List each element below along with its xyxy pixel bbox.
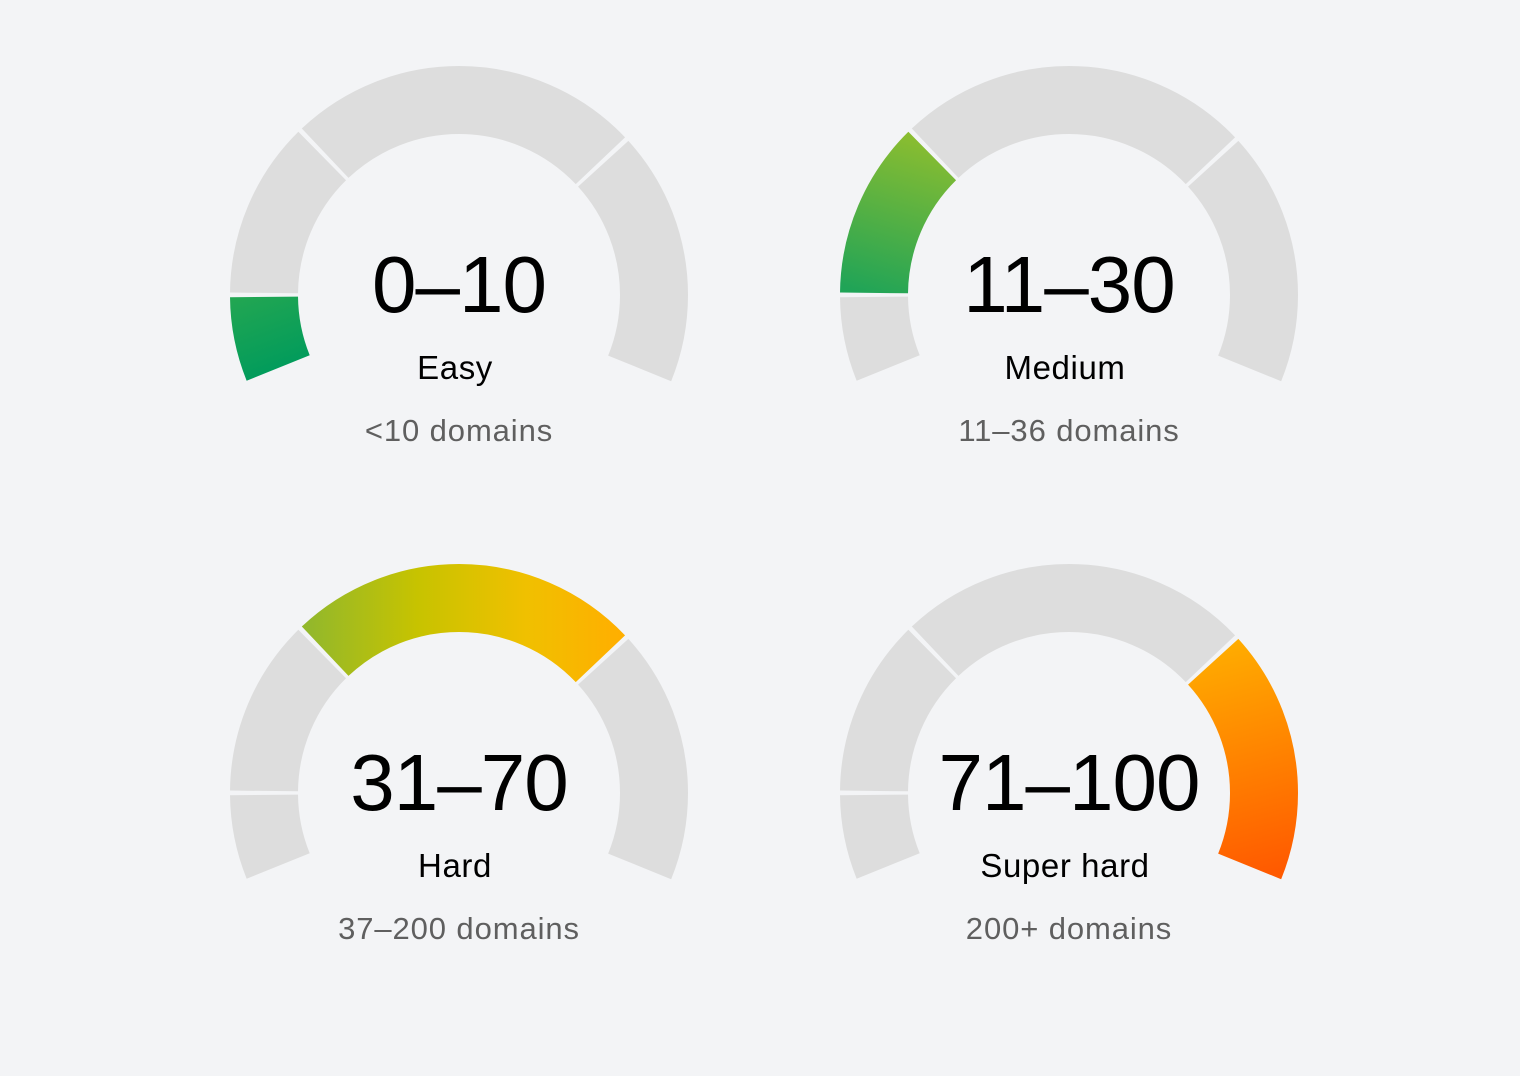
label: Easy: Easy: [417, 349, 493, 386]
gauge: medium: [874, 100, 1264, 490]
sub: 11–36 domains: 11–36 domains: [958, 413, 1180, 448]
number: 71–100: 71–100: [939, 738, 1199, 827]
label: Hard: Hard: [418, 847, 492, 884]
gauge: hard: [264, 598, 654, 988]
label: Medium: Medium: [1005, 349, 1125, 386]
number: 31–70: 31–70: [350, 738, 568, 827]
sub: 37–200 domains: 37–200 domains: [338, 911, 580, 946]
sub: 200+ domains: 200+ domains: [966, 911, 1172, 946]
label: Super hard: Super hard: [980, 847, 1150, 884]
number: 11–30: 11–30: [963, 240, 1175, 329]
number: 0–10: 0–10: [372, 240, 546, 329]
sub: <10 domains: <10 domains: [365, 413, 553, 448]
gauge: super hard: [874, 598, 1264, 988]
gauge: easy: [264, 100, 654, 490]
